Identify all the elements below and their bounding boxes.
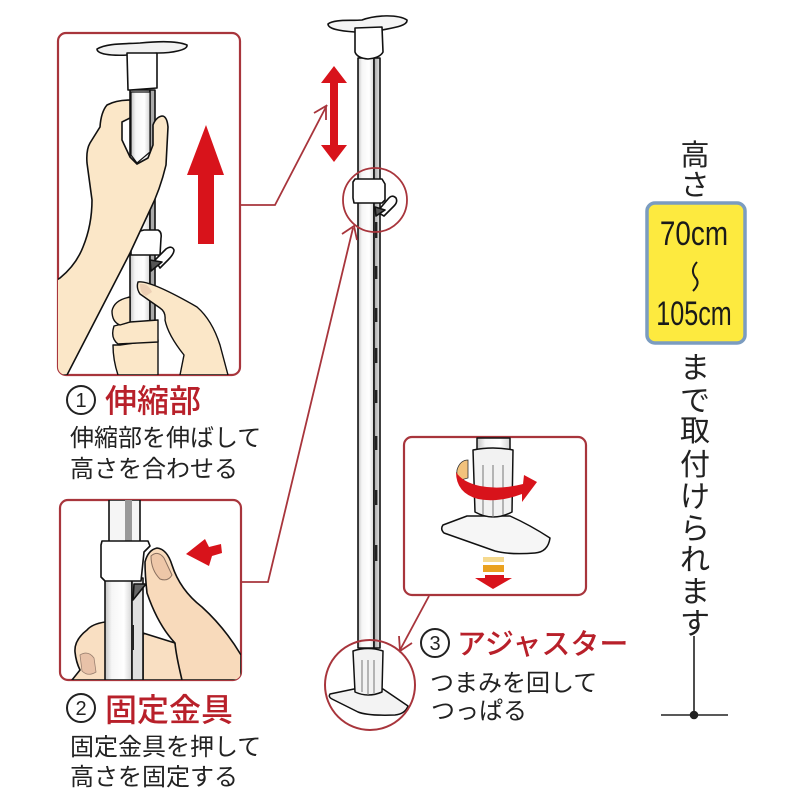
tube overlay in upper hand	[131, 92, 150, 163]
panel: telescoping section	[50, 33, 240, 375]
label 2 description: 固定金具を押して	[70, 734, 261, 761]
label 2 description: 高さを固定する	[70, 764, 238, 791]
double arrow: extension	[321, 66, 347, 162]
vertical caption: ら	[680, 513, 710, 546]
yellow range box: 105cm	[656, 295, 732, 333]
central pole	[328, 16, 407, 648]
vertical caption: 付	[680, 449, 710, 482]
heading: height: さ	[680, 170, 710, 202]
label 2 heading: 固定金具	[105, 692, 233, 728]
yellow range box: 70cm	[660, 214, 728, 253]
connector: panel 1 to extension	[240, 105, 327, 205]
vertical caption: け	[680, 481, 710, 514]
yellow range box	[647, 203, 745, 343]
vertical caption: ま	[680, 352, 710, 385]
floor marker line	[661, 636, 728, 718]
label 1 heading: 伸縮部	[105, 383, 201, 419]
label 3 description: つっぱる	[431, 698, 527, 725]
heading: height	[680, 139, 710, 202]
circle: clamp highlight	[343, 168, 407, 232]
vertical caption: 取	[680, 415, 710, 448]
label 3 heading: アジャスター	[457, 629, 628, 661]
vertical caption: ま	[680, 576, 710, 609]
label 2 heading: 2	[75, 698, 87, 720]
label 3 heading: 3	[429, 633, 441, 655]
label 1 description: 伸縮部を伸ばして	[70, 425, 261, 452]
lower hand	[112, 282, 228, 375]
rotation arrow	[456, 460, 537, 502]
panel: adjuster	[404, 437, 586, 595]
vertical caption	[680, 352, 710, 641]
heading: height: 高	[680, 139, 710, 172]
circle: adjuster highlight	[325, 640, 415, 730]
connector: panel 2 to clamp	[241, 226, 357, 582]
vertical caption: で	[680, 385, 710, 418]
tube in panel 1	[96, 40, 188, 322]
red arrow pointing left	[186, 539, 222, 566]
down arrow stripes	[475, 557, 512, 589]
connector: panel 3 to adjuster	[399, 596, 429, 651]
label 2 description	[70, 734, 261, 791]
big up arrow	[187, 125, 224, 244]
label 1 description	[70, 425, 261, 483]
label 1 heading: 1	[75, 390, 87, 412]
label 3 description	[430, 670, 597, 725]
label 1 description: 高さを合わせる	[70, 456, 238, 483]
vertical caption: れ	[680, 544, 710, 577]
vertical caption: す	[680, 608, 710, 641]
label 3 description: つまみを回して	[430, 670, 597, 697]
upper hand	[50, 100, 168, 375]
bottom adjuster knob and foot	[329, 648, 408, 715]
panel: fixing bracket	[60, 500, 241, 680]
